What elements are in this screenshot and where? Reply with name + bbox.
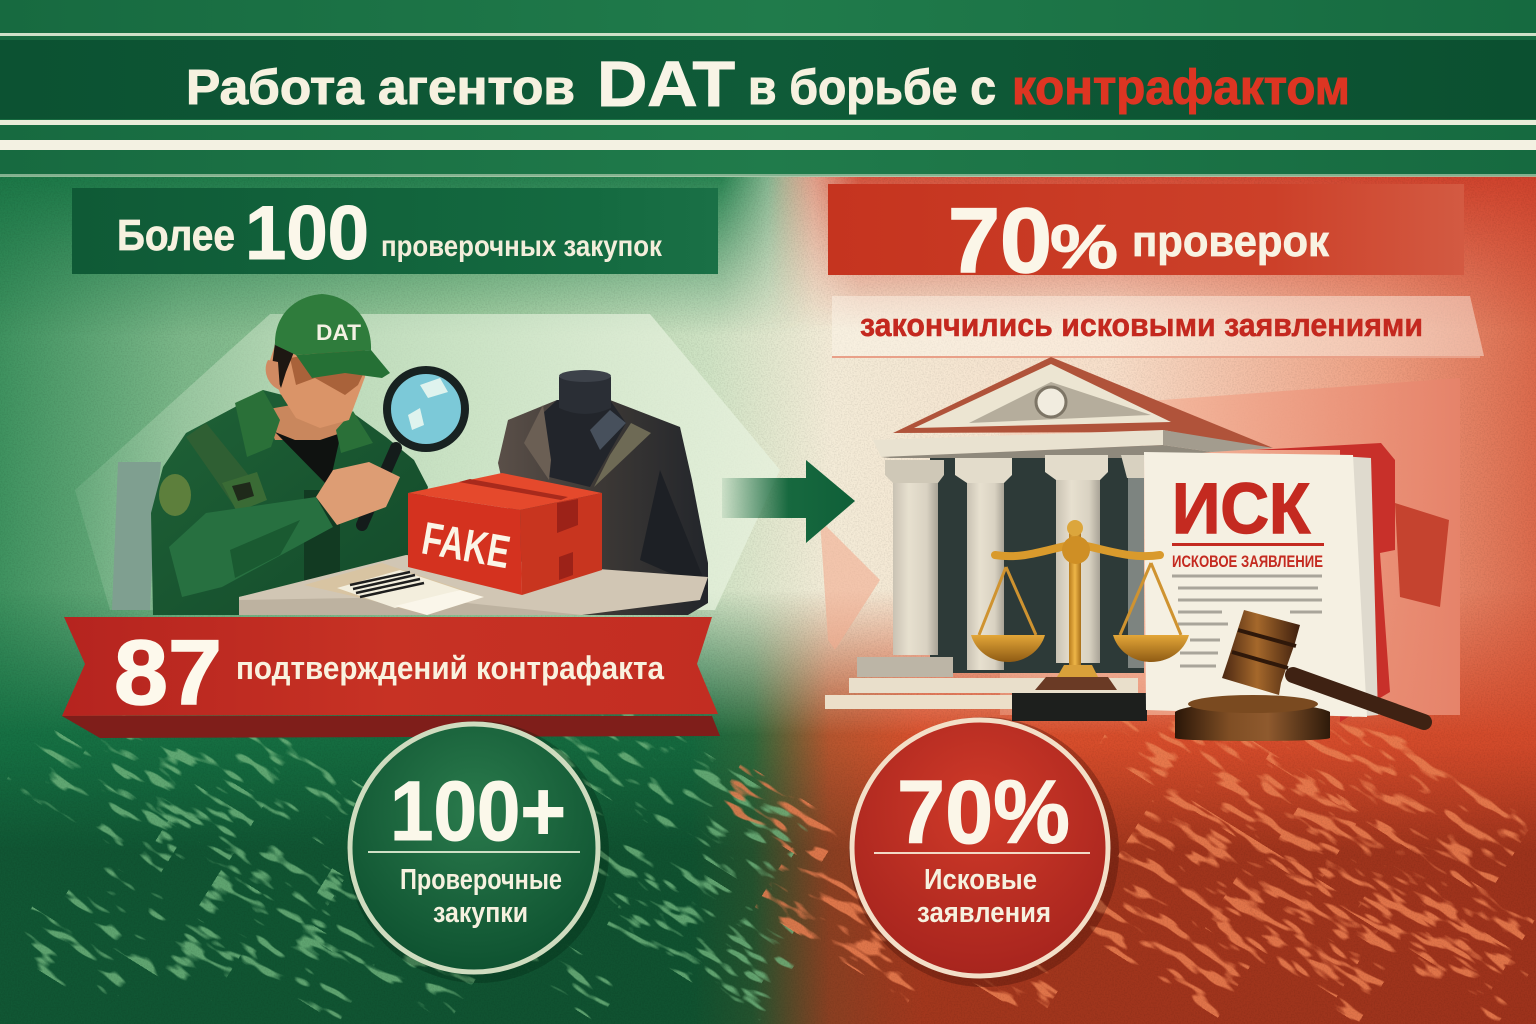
panel: light hexagon backdrop bbox=[75, 314, 780, 610]
arrow bbox=[722, 460, 855, 543]
column 4 bbox=[1121, 455, 1144, 478]
panel: green heading: 100 bbox=[245, 191, 369, 276]
column 1 bbox=[885, 460, 944, 483]
header banner bbox=[0, 0, 1536, 177]
icon: agent bbox=[112, 294, 428, 615]
icon: magnifying glass bbox=[316, 370, 465, 525]
ribbon: 87 подтверждений контрафакта: 87 bbox=[114, 622, 222, 724]
title: в борьбе с: в борьбе с bbox=[748, 61, 996, 115]
icon: FAKE box bbox=[408, 473, 602, 595]
shadow: green circle bbox=[347, 721, 609, 983]
steps bbox=[857, 657, 953, 677]
hair bbox=[272, 343, 294, 388]
stat circle: 70%: 70% bbox=[897, 763, 1070, 863]
chest patch bbox=[222, 472, 267, 512]
interior bbox=[930, 457, 1144, 673]
panel: green heading: Более bbox=[117, 211, 235, 260]
cap label: DAT bbox=[316, 320, 362, 345]
icon: courthouse bbox=[825, 357, 1273, 721]
face bbox=[269, 345, 365, 428]
panel: salmon diamond bbox=[820, 520, 880, 650]
ribbon: 87 подтверждений контрафакта bbox=[62, 617, 720, 738]
title: Работа агентов: Работа агентов bbox=[186, 61, 575, 115]
stat circle: 100+: Проверочные bbox=[400, 864, 562, 896]
panel: red heading bbox=[828, 184, 1464, 292]
arm bbox=[169, 497, 333, 597]
title: DAT: DAT bbox=[597, 48, 735, 120]
stat circle: 70% bbox=[852, 720, 1108, 976]
title: контрафактом: контрафактом bbox=[1012, 61, 1350, 115]
collars bbox=[235, 390, 280, 457]
bottom brush texture: orange bbox=[716, 673, 1535, 1023]
panel: green heading: проверочных закупок bbox=[381, 230, 663, 263]
stat circle: 100+ bbox=[350, 724, 598, 972]
chair bbox=[112, 462, 161, 610]
panel: red heading: % bbox=[1050, 213, 1118, 282]
icon: jacket on mannequin bbox=[498, 370, 708, 615]
stat circle: 70%: Исковые bbox=[924, 864, 1037, 896]
icon: lawsuit document: ИСК bbox=[1172, 470, 1311, 549]
icon: scales of justice bbox=[971, 520, 1189, 690]
shadow: red circle bbox=[849, 717, 1119, 987]
stat circle: 100+: закупки bbox=[433, 897, 528, 929]
stat circle: 100+: 100+ bbox=[390, 764, 566, 858]
bottom brush texture: green bbox=[5, 683, 814, 1023]
icon: table with papers bbox=[239, 555, 708, 615]
icon: lawsuit document bbox=[1144, 443, 1449, 722]
subheading band: закончились исковыми заявлениями bbox=[860, 307, 1423, 343]
entablature bbox=[873, 430, 1261, 457]
black tee bbox=[275, 432, 341, 487]
jacket bbox=[151, 390, 428, 615]
roof bbox=[893, 357, 1273, 448]
column 2 bbox=[955, 458, 1012, 483]
panel: salmon backdrop right bbox=[1000, 378, 1460, 715]
ribbon: 87 подтверждений контрафакта: подтверждений контрафакта bbox=[236, 650, 664, 686]
panel: green heading bbox=[72, 188, 718, 276]
icon: gavel bbox=[1175, 610, 1424, 741]
stat circle: 70%: заявления bbox=[917, 897, 1051, 929]
subheading band bbox=[832, 296, 1484, 358]
cap bbox=[275, 294, 371, 355]
panel: red heading: проверок bbox=[1132, 217, 1330, 266]
panel: red heading: 70 bbox=[948, 190, 1052, 292]
strap bbox=[186, 423, 263, 513]
shoulder patch bbox=[159, 474, 191, 516]
icon: lawsuit document: ИСКОВОЕ ЗАЯВЛЕНИЕ bbox=[1172, 552, 1323, 571]
neck bbox=[263, 400, 349, 440]
icon: FAKE box: FAKE bbox=[418, 512, 514, 578]
column 3 bbox=[1045, 455, 1108, 480]
